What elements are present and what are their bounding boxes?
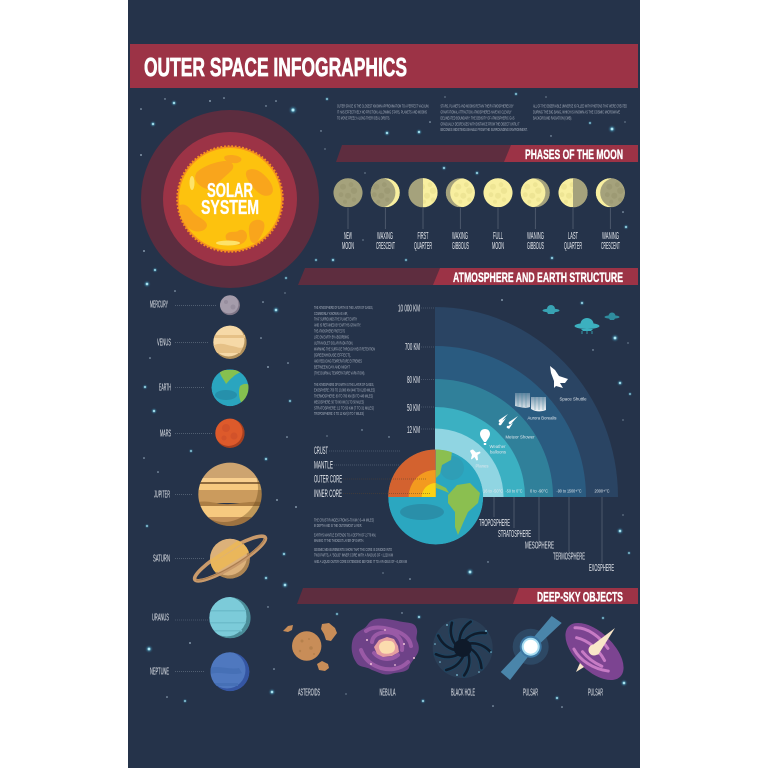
atmosphere layers chart: [398, 304, 620, 571]
atmosphere text: THE ATMOSPHERE OF EARTH IS THE LAYER OF GASES,: [314, 382, 374, 387]
pulsar galaxy: PULSAR: [588, 688, 603, 698]
mercury: MERCURY: [150, 300, 168, 310]
saturn: SATURN: [153, 554, 170, 564]
jupiter: [154, 462, 262, 526]
altitude scale: [398, 304, 435, 436]
venus: VENUS: [157, 338, 171, 348]
black hole: BLACK HOLE: [451, 688, 475, 698]
intro text columns: DELINEATED BOUNDARY: THE DENSITY OF ATMOSPHERIC GAS: [440, 116, 515, 120]
waning gibbous: WANING: [527, 231, 544, 242]
atmosphere text: AND IS RETAINED BY EARTH'S GRAVITY.: [314, 323, 361, 328]
last quarter: [558, 178, 588, 252]
layer labels: OUTER CORE: [314, 474, 342, 486]
intro text columns: BECOMES INDISTINGUISHABLE FROM THE SURROUNDING ENVIRONMENT.: [440, 127, 528, 132]
asteroids: ASTEROIDS: [298, 688, 320, 698]
full moon: [483, 178, 513, 252]
temperature labels: [483, 488, 610, 494]
moon phases chart: CRESCENT: [376, 241, 395, 252]
waning crescent: WANING: [602, 231, 619, 242]
icon: meteor shower: [499, 414, 535, 440]
icon: ufos: [542, 305, 620, 334]
earth structure text: [314, 518, 407, 564]
waning crescent: CRESCENT: [601, 241, 620, 252]
temperature labels: 16 to -50°C: [483, 488, 504, 494]
sun label: SYSTEM: [201, 197, 259, 219]
poster background: [128, 0, 640, 768]
waning gibbous: [520, 178, 550, 249]
earth cross-section: [314, 445, 483, 544]
earth: [159, 369, 250, 406]
atmosphere text: AND REDUCING TEMPERATURE EXTREMES: [314, 359, 362, 364]
atmosphere text: STRATOSPHERE: 12 TO 50 KM (7 TO 31 MILES): [314, 405, 374, 410]
intro text columns: OUTER SPACE IS THE CLOSEST KNOWN APPROXIMATION TO A PERFECT VACUUM.: [337, 104, 429, 108]
layer names: [479, 518, 614, 574]
asteroids: [283, 623, 337, 698]
earth structure text: THE CRUST RANGES FROM 5–70 KM (~3–44 MILES): [314, 518, 374, 522]
altitude scale: 80 KM: [407, 375, 420, 386]
intro text columns: STARS, PLANETS AND MOONS RETAIN THEIR ATMOSPHERES BY: [440, 104, 514, 108]
icon: meteor shower: Meteor Shower: [506, 434, 535, 440]
intro text columns: GRAVITATIONAL ATTRACTION. ATMOSPHERES HAVE NO CLEARLY: [440, 110, 512, 114]
atmosphere text: THE ATMOSPHERE PROTECTS: [314, 329, 345, 334]
background stars: [140, 91, 632, 708]
saturn: [153, 534, 268, 583]
altitude scale: 700 KM: [405, 342, 420, 353]
mars: [160, 418, 245, 448]
altitude scale: 10 000 KM: [398, 304, 420, 314]
neptune: [150, 652, 250, 691]
earth structure text: MAKING IT THE THICKEST LAYER OF EARTH.: [314, 538, 364, 543]
deep-sky objects: [283, 613, 634, 698]
first quarter: FIRST: [418, 231, 428, 242]
layer names: STRATOSPHERE: [498, 529, 531, 540]
atmosphere text: WARMING THE SURFACE THROUGH HEAT RETENTION: [314, 346, 375, 351]
layer name leader lines: [494, 497, 602, 563]
uranus: URANUS: [152, 612, 169, 624]
heading: deep-sky objects: DEEP-SKY OBJECTS: [537, 590, 623, 604]
full moon: MOON: [492, 241, 504, 252]
altitude scale: 50 KM: [407, 403, 420, 414]
atmosphere text: [314, 305, 375, 416]
icon: weather balloon: Weather: [490, 444, 506, 449]
black hole: [433, 618, 493, 698]
new moon: NEW: [344, 231, 352, 242]
heading: phases of the moon: PHASES OF THE MOON: [525, 147, 623, 162]
moon phases chart: QUARTER: [414, 241, 432, 252]
intro text columns: IT HAS EFFECTIVELY NO FRICTION, ALLOWING STARS, PLANETS AND MOONS: [337, 110, 427, 114]
sun: solar system: [141, 110, 319, 288]
pulsar: PULSAR: [523, 688, 538, 698]
nebula: NEBULA: [380, 688, 396, 698]
atmosphere text: LIFE ON EARTH BY ABSORBING: [314, 335, 349, 340]
temperature labels: 2000+°C: [594, 488, 610, 494]
atmosphere text: EXOSPHERE: 700 TO 10,000 KM (440 TO 6,200 MILES): [314, 388, 375, 393]
icon: aurora borealis: [515, 393, 557, 420]
icon: weather balloon: balloons: [490, 450, 507, 454]
jupiter: JUPITER: [154, 490, 170, 500]
temperature labels: -50 to 0°C: [506, 488, 523, 494]
moon phases chart: [333, 178, 629, 252]
atmosphere text: (THE DIURNAL TEMPERATURE VARIATION).: [314, 370, 365, 375]
heading: atmosphere and earth structure: ATMOSPHERE AND EARTH STRUCTURE: [453, 270, 623, 285]
neptune: NEPTUNE: [150, 666, 169, 678]
waning gibbous: GIBBOUS: [527, 241, 544, 252]
atmosphere text: THERMOSPHERE: 80 TO 700 KM (50 TO 440 MILES): [314, 394, 373, 399]
earth: EARTH: [159, 382, 171, 394]
earth structure text: TWO PARTS, A "SOLID" INNER CORE WITH A RADIUS OF ~1,220 KM: [314, 552, 393, 558]
full moon: FULL: [493, 231, 503, 242]
icon: plane: Planes: [476, 464, 489, 468]
moon phases chart: QUARTER: [564, 241, 582, 252]
waxing crescent: [370, 178, 400, 249]
icon: plane: [470, 450, 489, 468]
mars: MARS: [160, 428, 171, 440]
altitude scale: 12 KM: [407, 425, 420, 436]
icon: space shuttle: Space Shuttle: [560, 396, 587, 402]
new moon: MOON: [342, 241, 354, 252]
intro text columns: [337, 104, 627, 132]
mercury: [150, 294, 240, 315]
layer labels: INNER CORE: [314, 488, 342, 500]
intro text columns: ALL OF THE OBSERVABLE UNIVERSE IS FILLED WITH PHOTONS THAT WERE CREATED: [533, 104, 627, 108]
title banner: [130, 44, 638, 88]
first quarter: [408, 178, 438, 252]
layer labels: [314, 445, 430, 500]
intro text columns: GRADUALLY DECREASES WITH DISTANCE FROM THE OBJECT UNTIL IT: [440, 122, 520, 126]
new moon: [333, 178, 363, 252]
intro text columns: TO MOVE FREELY ALONG THEIR IDEAL ORBITS.: [337, 116, 390, 120]
venus: [157, 324, 247, 359]
pulsar: [501, 616, 562, 698]
temperature labels: -90 to 1500+°C: [556, 488, 582, 494]
intro text columns: DURING THE BIG BANG, WHICH IS KNOWN AS THE COSMIC MICROWAVE: [533, 110, 620, 114]
earth structure text: EARTH'S MANTLE EXTENDS TO A DEPTH OF 2,770 KM,: [314, 532, 376, 538]
nebula: [352, 619, 419, 698]
atmosphere text: BETWEEN DAY AND NIGHT: [314, 364, 350, 369]
atmosphere text: MESOSPHERE: 50 TO 80 KM (31 TO 50 MILES): [314, 400, 364, 405]
earth structure text: AND A LIQUID OUTER CORE EXTENDING BEYOND IT TO A RADIUS OF ~3,400 KM: [314, 559, 407, 564]
atmosphere text: THE ATMOSPHERE OF EARTH IS THE LAYER OF GASES,: [314, 305, 373, 310]
temperature labels: 0 to -90°C: [530, 488, 549, 494]
text: EXOSPHERE: [589, 563, 614, 574]
atmosphere text: ULTRAVIOLET SOLAR RADIATION,: [314, 340, 353, 345]
layer names: TERMOSPHERE: [553, 552, 585, 562]
intro text columns: BACKGROUND RADIATION (CMB).: [533, 116, 572, 120]
icon: weather balloon: [480, 429, 507, 454]
layer labels: MANTLE: [314, 460, 333, 472]
uranus: [152, 596, 251, 638]
atmosphere text: TROPOSPHERE: 0 TO 12 KM (0 TO 7 MILES): [314, 411, 364, 416]
planets column: [150, 294, 270, 691]
heading: atmosphere and earth structure: [298, 268, 638, 285]
pulsar galaxy: [555, 613, 634, 698]
last quarter: LAST: [568, 231, 578, 242]
earth structure text: IN DEPTH AND IS THE OUTERMOST LAYER.: [314, 523, 362, 528]
sun label: SOLAR: [207, 180, 253, 202]
heading: phases of the moon: [336, 145, 638, 162]
heading: deep-sky objects: [297, 588, 638, 604]
waning crescent: [596, 178, 625, 249]
atmosphere text: THAT SURROUNDS THE PLANET EARTH: [314, 317, 357, 322]
icon: space shuttle: [550, 366, 587, 402]
waxing gibbous: GIBBOUS: [452, 241, 469, 252]
layer names: MESOPHERE: [525, 540, 554, 552]
waxing gibbous: [446, 178, 475, 249]
layer names: TROPOSPHERE: [479, 518, 510, 529]
sun label: [201, 180, 259, 219]
earth structure text: SEISMIC MEASUREMENTS SHOW THAT THE CORE IS DIVIDED INTO: [314, 547, 392, 552]
atmosphere text: COMMONLY KNOWN AS AIR,: [314, 311, 348, 316]
waxing crescent: WAXING: [377, 231, 393, 242]
icon: aurora borealis: Aurora Borealis: [528, 416, 557, 420]
title: OUTER SPACE INFOGRAPHICS: [144, 52, 407, 82]
waxing gibbous: WAXING: [452, 231, 468, 242]
layer labels: CRUST: [314, 445, 328, 457]
atmosphere text: (GREENHOUSE EFFECT),: [314, 353, 351, 358]
